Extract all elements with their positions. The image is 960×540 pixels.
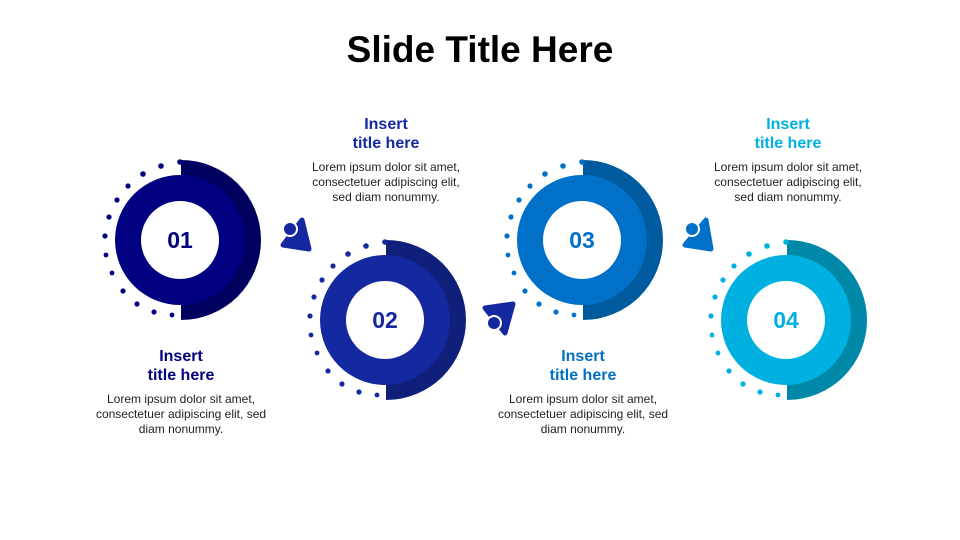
step 4 circle (708, 239, 867, 400)
arrow 3 (685, 220, 711, 249)
step 4 circle: 04 (773, 307, 799, 333)
step 2 circle: 02 (372, 307, 398, 333)
text 2: Insert (364, 116, 408, 133)
text 2: Lorem ipsum dolor sit amet, consectetuer adipiscing elit, sed diam nonummy. (312, 160, 460, 204)
text 4: Insert (766, 116, 810, 133)
text 3: Lorem ipsum dolor sit amet, consectetuer adipiscing elit, sed diam nonummy. (498, 392, 668, 436)
text 4: title here (755, 135, 821, 152)
text 2: title here (353, 135, 419, 152)
text 3 (498, 348, 668, 436)
text 1: title here (148, 367, 214, 384)
text 4 (714, 116, 862, 204)
title: Slide Title Here (347, 29, 613, 70)
step 1 circle (102, 159, 261, 320)
text 1: Lorem ipsum dolor sit amet, consectetuer adipiscing elit, sed diam nonummy. (96, 392, 266, 436)
text 3: Insert (561, 348, 605, 365)
arrow 1 (283, 220, 309, 249)
text 4: Lorem ipsum dolor sit amet, consectetuer adipiscing elit, sed diam nonummy. (714, 160, 862, 204)
step 2 circle (307, 239, 466, 400)
text 1: Insert (159, 348, 203, 365)
text 3: title here (550, 367, 616, 384)
text 2 (312, 116, 460, 204)
step 1 circle: 01 (167, 227, 193, 253)
text 1 (96, 348, 266, 436)
step 3 circle (504, 159, 663, 320)
step 3 circle: 03 (569, 227, 595, 253)
arrow 2 (485, 304, 513, 333)
